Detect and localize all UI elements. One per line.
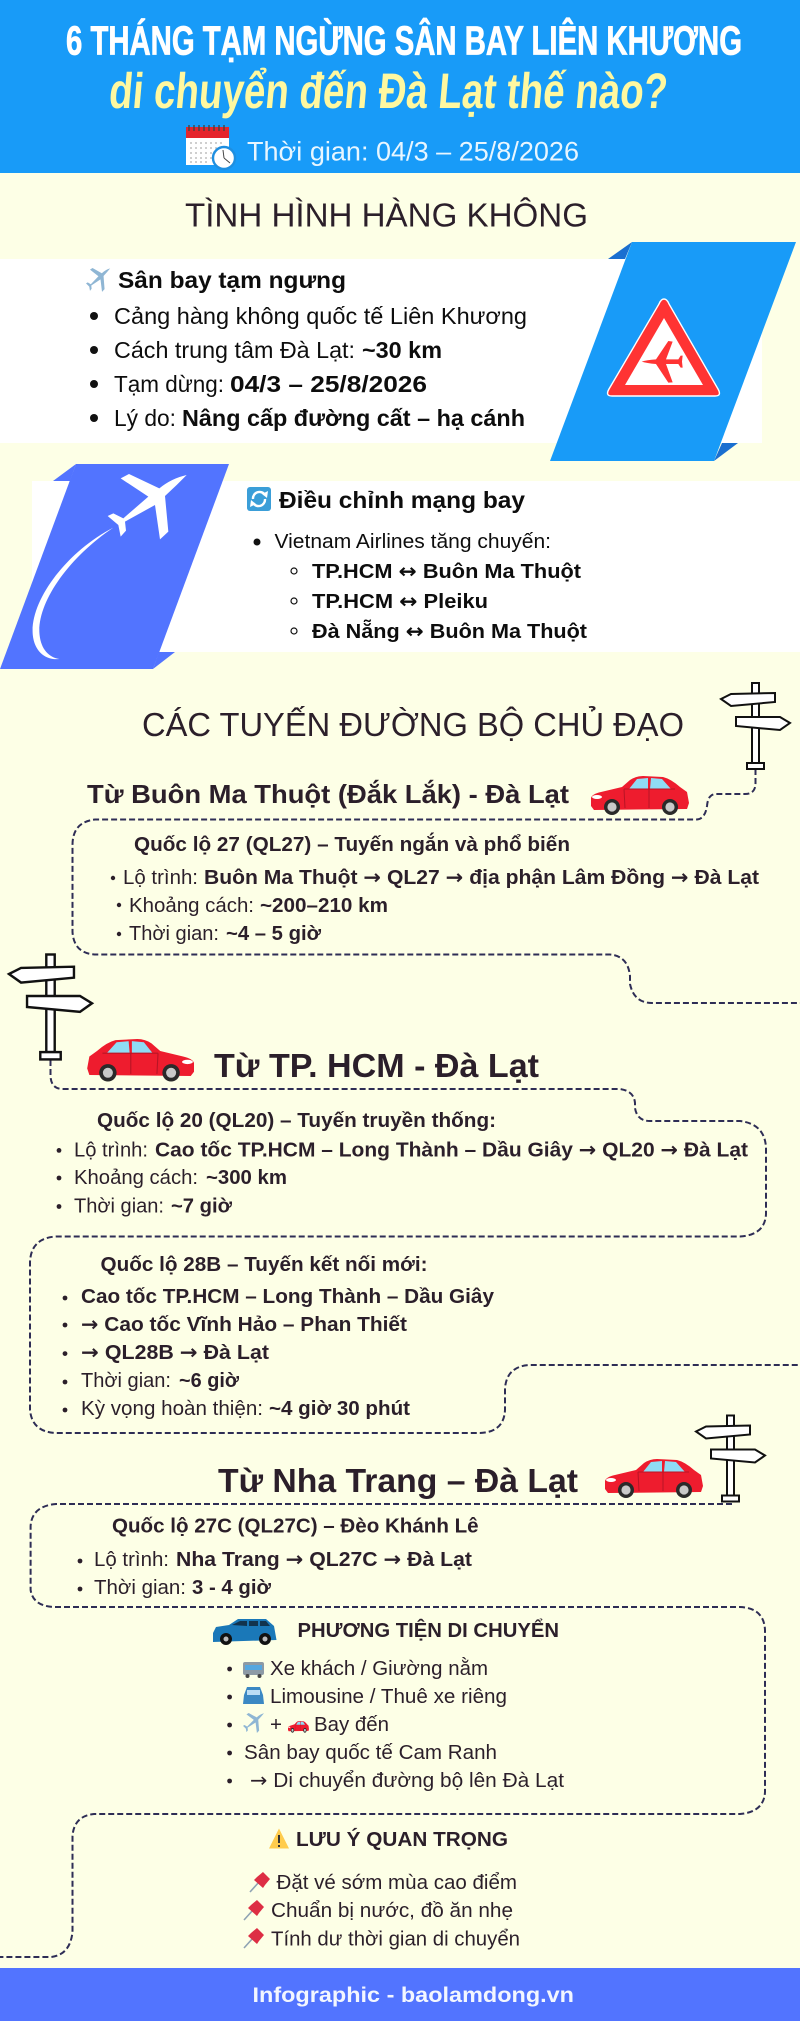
time range: Thời gian: 04/3 – 25/8/2026 bbox=[247, 137, 579, 167]
icon: red car bbox=[605, 1459, 703, 1498]
bullet: itinerary: Nha Trang → QL27C → Đà Lạt bbox=[176, 1547, 472, 1571]
panel: flight network bbox=[0, 464, 800, 669]
panel: airport closure bbox=[0, 242, 796, 461]
dashed road: Nha Trang section bbox=[0, 1504, 765, 1957]
icon: blue SUV bbox=[213, 1619, 276, 1645]
footer bbox=[0, 1968, 800, 2021]
icon: airplane emoji bbox=[86, 268, 110, 292]
panel: important notes bbox=[244, 1827, 520, 1950]
route block: Nha Trang to Da Lat bbox=[78, 1459, 703, 1599]
bullet: bus: Xe khách / Giường nằm bbox=[270, 1657, 488, 1680]
road name: QL20: Quốc lộ 20 (QL20) – Tuyến truyền thống: bbox=[97, 1110, 496, 1132]
bullet: reason: Lý do: bbox=[114, 405, 176, 431]
route block: Ho Chi Minh City to Da Lat bbox=[57, 1039, 748, 1420]
ribbon with warning sign bbox=[550, 242, 796, 461]
icon: signpost 2 bbox=[9, 954, 92, 1059]
route: HCM to Buon Ma Thuot: TP.HCM ↔ Buôn Ma Thuột bbox=[312, 559, 581, 583]
bullet: Vinh Hao expressway: → Cao tốc Vĩnh Hảo – Phan Thiết bbox=[81, 1312, 407, 1336]
header banner bbox=[0, 0, 800, 173]
route title: Từ TP. HCM - Đà Lạt bbox=[214, 1047, 539, 1084]
bullet: itinerary: Buôn Ma Thuột → QL27 → địa phận Lâm Đồng → Đà Lạt bbox=[204, 865, 759, 889]
bullet: expected: Kỳ vọng hoàn thiện: bbox=[81, 1398, 263, 1420]
bullet: itinerary: Lộ trình: bbox=[123, 867, 198, 889]
bullet: expected: ~4 giờ 30 phút bbox=[269, 1398, 410, 1420]
bullet: Cam Ranh airport: Sân bay quốc tế Cam Ranh bbox=[244, 1742, 497, 1764]
bullet: duration: ~6 giờ bbox=[179, 1370, 240, 1392]
route title: Từ Buôn Ma Thuột (Đắk Lắk) - Đà Lạt bbox=[87, 779, 569, 809]
route: Da Nang to Buon Ma Thuot: Đà Nẵng ↔ Buôn Ma Thuột bbox=[312, 619, 587, 643]
bullet: road to Da Lat: → Di chuyển đường bộ lên Đà Lạt bbox=[250, 1768, 564, 1792]
bullet: itinerary: Lộ trình: bbox=[74, 1140, 148, 1162]
bullet: expected bbox=[63, 1398, 410, 1420]
icon: warning bbox=[269, 1828, 289, 1848]
bullet: reason: Nâng cấp đường cất – hạ cánh bbox=[182, 405, 525, 431]
bullet: expressway: Cao tốc TP.HCM – Long Thành – Dầu Giây bbox=[81, 1286, 495, 1308]
route block: Buon Ma Thuot to Da Lat bbox=[87, 776, 759, 945]
bullet: duration bbox=[117, 923, 322, 945]
bullet: limousine: Limousine / Thuê xe riêng bbox=[270, 1686, 507, 1708]
road name: QL28B: Quốc lộ 28B – Tuyến kết nối mới: bbox=[100, 1254, 428, 1276]
bullet: distance: ~200–210 km bbox=[260, 895, 388, 917]
bullet: QL28B: → QL28B → Đà Lạt bbox=[81, 1340, 269, 1364]
bullet: distance: Khoảng cách: bbox=[74, 1167, 198, 1189]
panel heading: Điều chỉnh mạng bay bbox=[279, 487, 525, 513]
bullet: duration: Thời gian: bbox=[94, 1577, 186, 1599]
bullet: duration: 3 - 4 giờ bbox=[192, 1577, 272, 1599]
road name: Quốc lộ 27 (QL27) – Tuyến ngắn và phổ biến bbox=[134, 832, 570, 856]
note: allow extra time: Tính dư thời gian di chuyển bbox=[271, 1928, 520, 1950]
bullet: distance bbox=[90, 337, 442, 363]
bullet: distance: ~300 km bbox=[206, 1167, 287, 1189]
icon: signpost 1 bbox=[721, 683, 790, 769]
heading: aviation situation: TÌNH HÌNH HÀNG KHÔNG bbox=[185, 197, 588, 234]
bullet: itinerary: Cao tốc TP.HCM – Long Thành – Dầu Giây → QL20 → Đà Lạt bbox=[155, 1138, 748, 1162]
icon: red car bbox=[87, 1039, 194, 1082]
bullet: fly and drive bbox=[227, 1713, 389, 1736]
bullet: duration: ~7 giờ bbox=[171, 1195, 233, 1217]
route: HCM to Pleiku: TP.HCM ↔ Pleiku bbox=[312, 589, 488, 613]
bullet: distance bbox=[117, 895, 388, 917]
icon: red car bbox=[591, 776, 689, 815]
bullet: closure dates bbox=[90, 371, 427, 397]
footer credit: Infographic - baolamdong.vn bbox=[252, 1984, 574, 2007]
bullet: duration bbox=[78, 1577, 272, 1599]
bullet: duration: Thời gian: bbox=[81, 1370, 171, 1392]
bullet: fly and drive: + bbox=[270, 1714, 282, 1736]
icon: airplane and trail bbox=[33, 474, 187, 659]
bullet: duration: ~4 – 5 giờ bbox=[226, 923, 322, 945]
bullet: fly and drive: Bay đến bbox=[314, 1714, 389, 1736]
ribbon with airplane bbox=[0, 464, 229, 669]
panel heading: PHƯƠNG TIỆN DI CHUYỂN bbox=[298, 1618, 559, 1642]
bullet: distance: ~30 km bbox=[362, 337, 442, 363]
bullet: Vietnam Airlines: Vietnam Airlines tăng chuyến: bbox=[274, 531, 551, 553]
icon: refresh bbox=[247, 487, 271, 511]
panel heading: Sân bay tạm ngưng bbox=[118, 267, 346, 293]
panel: means of transport bbox=[213, 1618, 564, 1792]
heading: main road routes: CÁC TUYẾN ĐƯỜNG BỘ CHỦ ĐẠO bbox=[142, 706, 684, 743]
bullet: duration bbox=[57, 1195, 233, 1217]
bullet: distance bbox=[57, 1167, 287, 1189]
bullet: airport name: Cảng hàng không quốc tế Liên Khương bbox=[114, 303, 527, 329]
bullet: duration bbox=[63, 1370, 240, 1392]
note: water and snacks: Chuẩn bị nước, đồ ăn nhẹ bbox=[271, 1900, 513, 1922]
bullet: itinerary: Lộ trình: bbox=[94, 1549, 169, 1571]
bullet: distance: Cách trung tâm Đà Lạt: bbox=[114, 337, 355, 363]
road name: Quốc lộ 27C (QL27C) – Đèo Khánh Lê bbox=[112, 1516, 479, 1538]
icon: warning triangle with plane bbox=[608, 299, 719, 396]
note: book early: Đặt vé sớm mùa cao điểm bbox=[276, 1872, 517, 1894]
dashed road: Ho Chi Minh section bbox=[30, 1060, 800, 1433]
bullet: closure dates: Tạm dừng: bbox=[114, 371, 224, 397]
bullet: closure dates: 04/3 – 25/8/2026 bbox=[230, 371, 427, 397]
panel heading: LƯU Ý QUAN TRỌNG bbox=[296, 1827, 508, 1851]
icon: signpost 3 bbox=[696, 1416, 765, 1502]
bullet: duration: Thời gian: bbox=[129, 923, 219, 945]
dashed road: Buon Ma Thuot section bbox=[72, 769, 800, 1003]
icon: calendar and clock bbox=[186, 125, 235, 169]
bullet: distance: Khoảng cách: bbox=[129, 895, 254, 917]
route title: Từ Nha Trang – Đà Lạt bbox=[218, 1462, 578, 1499]
bullet: duration: Thời gian: bbox=[74, 1195, 164, 1217]
